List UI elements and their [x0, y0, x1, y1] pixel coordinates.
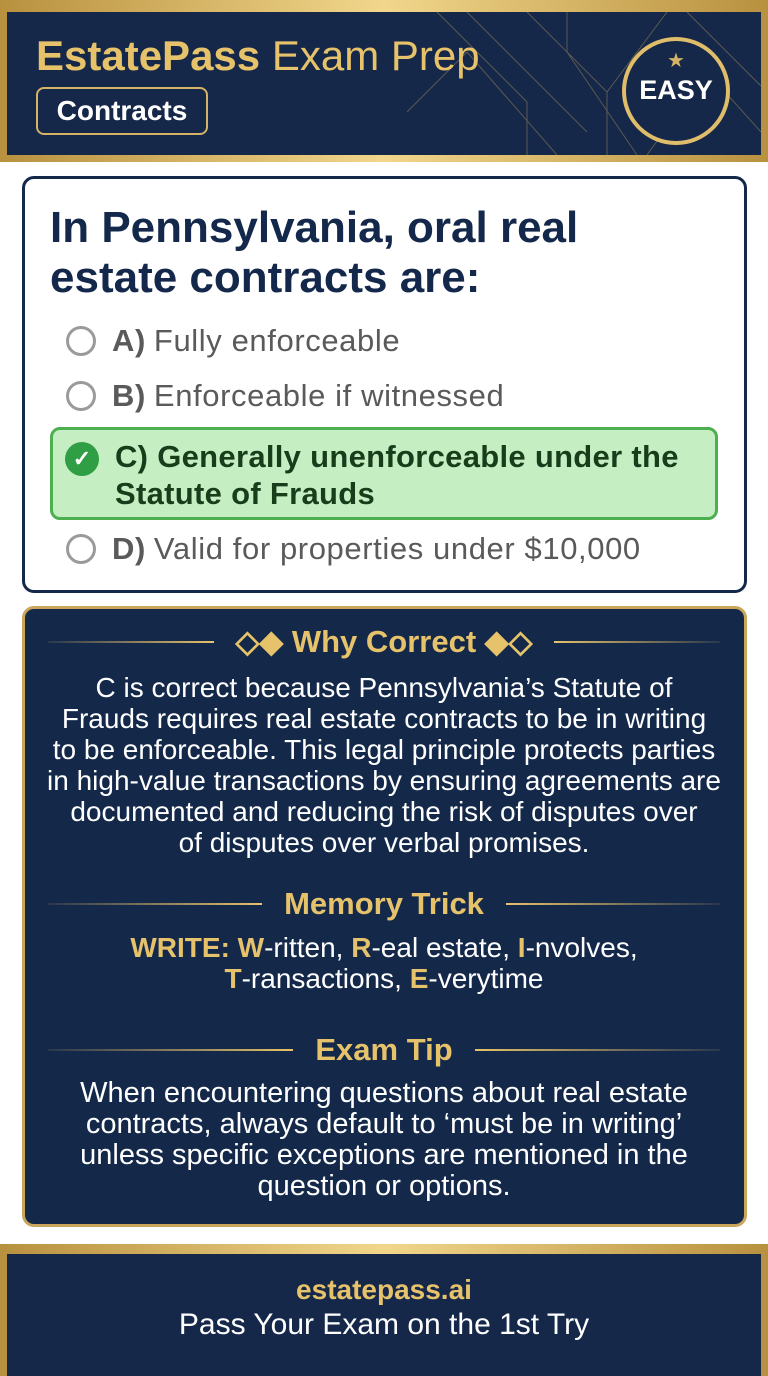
why correct text: of disputes over verbal promises. — [179, 827, 589, 858]
why correct text — [47, 672, 721, 858]
why correct text: Frauds requires real estate contracts to be in writing — [62, 703, 706, 734]
exam tip text: contracts, always default to ‘must be in writing’ — [86, 1108, 682, 1140]
memory trick text — [130, 932, 638, 994]
option B: B) — [112, 378, 146, 413]
option A: Fully enforceable — [154, 323, 400, 358]
exam tip text: When encountering questions about real estate — [80, 1077, 688, 1109]
memory trick text: WRITE: W-ritten, R-eal estate, I-nvolves, — [130, 932, 638, 963]
why correct text: in high-value transactions by ensuring agreements are — [47, 765, 721, 796]
exam tip text: question or options. — [257, 1170, 511, 1202]
why correct text: documented and reducing the risk of disputes over — [70, 796, 698, 827]
title: EstatePass Exam Prep — [36, 32, 480, 79]
footer — [0, 1244, 768, 1376]
heading: Why Correct: ◇◆ Why Correct ◆◇ — [236, 624, 532, 659]
option C (correct) — [50, 427, 718, 520]
question text: estate contracts are: — [50, 253, 480, 302]
question card — [22, 176, 747, 593]
difficulty badge: EASY: EASY — [639, 75, 713, 105]
footer text — [179, 1274, 589, 1341]
question text — [50, 203, 578, 302]
explanation panel — [22, 606, 747, 1227]
icon: star: ★ — [667, 50, 685, 72]
difficulty badge: EASY — [622, 37, 730, 145]
category badge: Contracts: Contracts — [57, 95, 187, 126]
exam tip text — [80, 1077, 688, 1202]
category badge: Contracts — [36, 87, 208, 135]
option B: Enforceable if witnessed — [154, 378, 504, 413]
option A: A) — [112, 323, 146, 358]
icon: check — [65, 442, 99, 476]
footer text: estatepass.ai — [296, 1274, 472, 1305]
option D: D) — [112, 531, 146, 566]
option D: Valid for properties under $10,000 — [154, 531, 641, 566]
icon: check: ✓ — [73, 446, 91, 471]
option C (correct): C) Generally unenforceable under the — [115, 439, 679, 474]
exam tip text: unless specific exceptions are mentioned in the — [80, 1139, 688, 1171]
question text: In Pennsylvania, oral real — [50, 203, 578, 252]
header — [0, 0, 768, 162]
memory trick text: T-ransactions, E-verytime — [224, 963, 544, 994]
heading: Memory Trick: Memory Trick — [284, 886, 484, 921]
option C (correct): Statute of Frauds — [115, 476, 375, 511]
footer text: Pass Your Exam on the 1st Try — [179, 1308, 589, 1341]
why correct text: to be enforceable. This legal principle protects parties — [53, 734, 715, 765]
heading: Exam Tip: Exam Tip — [315, 1032, 453, 1067]
why correct text: C is correct because Pennsylvania’s Statute of — [96, 672, 672, 703]
